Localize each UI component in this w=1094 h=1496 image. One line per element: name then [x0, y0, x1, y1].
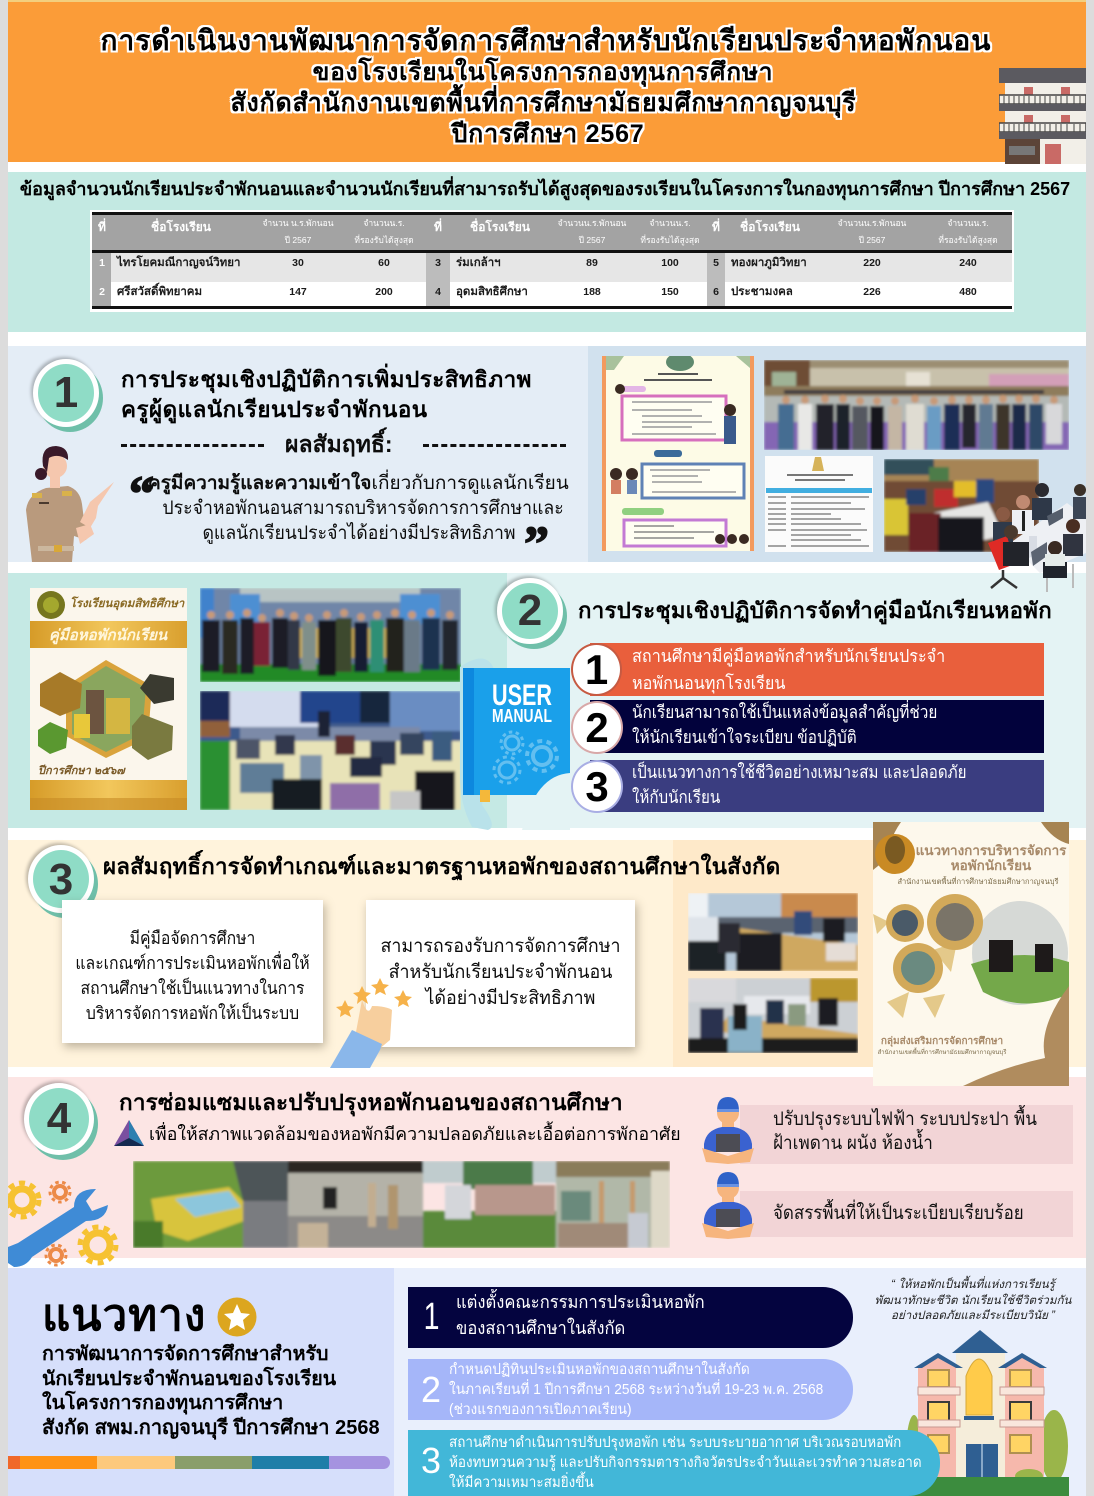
card left: และเกณฑ์การประเมินหอพักเพื่อให้	[75, 953, 310, 973]
title	[100, 24, 992, 148]
illustration: office meeting	[988, 483, 1086, 592]
table: schools: 89	[586, 257, 598, 269]
image: meeting photo 2	[688, 978, 858, 1053]
table: schools: ชื่อโรงเรียน	[740, 220, 800, 234]
page side strips	[0, 0, 8, 1496]
bar 1	[590, 643, 1044, 696]
pill 2: ในภาคเรียนที่ 1 ปีการศึกษา 2568 ระหว่างวันที่ 19-23 พ.ค. 2568	[449, 1382, 823, 1398]
image: guidance cover: กลุ่มส่งเสริมการจัดการศึกษา	[881, 1035, 1003, 1047]
heading section 1	[121, 364, 532, 424]
number 3	[571, 760, 623, 813]
number 3: 3	[585, 763, 609, 810]
card left: มีคู่มือจัดการศึกษา	[130, 928, 255, 948]
bar 2	[590, 700, 1044, 753]
illustration: house	[908, 1330, 1069, 1496]
icon: technician 2	[702, 1172, 754, 1239]
table: schools: 5	[713, 257, 719, 269]
badge 1	[33, 359, 99, 427]
image: manual cover	[30, 588, 187, 810]
image: seminar photo	[200, 691, 461, 810]
subheading section 4: เพื่อให้สภาพแวดล้อมของหอพักมีความปลอดภัยและเอื้อต่อการพักอาศัย	[149, 1124, 681, 1144]
icon: teacher	[26, 446, 114, 562]
icon: user manual book: MANUAL	[492, 706, 552, 726]
table: schools: ปี 2567	[285, 235, 311, 245]
table: schools: 3	[435, 257, 441, 269]
panel: section 3	[8, 840, 1086, 1067]
table: schools: 240	[959, 257, 977, 269]
badge 2: 2	[518, 586, 542, 635]
heading section 3: ผลสัมฤทธิ์การจัดทำเกณฑ์และมาตรฐานหอพักของสถานศึกษาในสังกัด	[103, 854, 780, 879]
table: schools: อุดมสิทธิศึกษา	[456, 286, 528, 298]
badge 2	[497, 578, 563, 644]
icon: user manual book	[460, 658, 570, 830]
title: สังกัดสำนักงานเขตพื้นที่การศึกษามัธยมศึกษากาญจนบุรี	[230, 89, 857, 117]
bar 1: หอพักนอนทุกโรงเรียน	[632, 673, 785, 693]
table: schools: ปี 2567	[579, 235, 605, 245]
guidelines text	[42, 1343, 380, 1440]
pill 3: สถานศึกษาดำเนินการปรับปรุงหอพัก เช่น ระบบระบายอากาศ บริเวณรอบหอพัก	[449, 1435, 901, 1451]
table: schools: ชื่อโรงเรียน	[151, 220, 211, 234]
card right: ได้อย่างมีประสิทธิภาพ	[425, 988, 595, 1009]
guidelines text: สังกัด สพม.กาญจนบุรี ปีการศึกษา 2568	[42, 1416, 380, 1438]
bar 2: นักเรียนสามารถใช้เป็นแหล่งข้อมูลสำคัญที่ช่วย	[632, 702, 937, 722]
panel: header banner	[8, 0, 1086, 162]
image: manual cover: ปีการศึกษา ๒๕๖๗	[38, 764, 126, 777]
icon: wrench and gears	[8, 1180, 118, 1267]
result text: ครูมีความรู้และความเข้าใจเกี่ยวกับการดูแลนักเรียน	[148, 473, 569, 494]
table: schools: ไทรโยคมณีกาญจน์วิทยา	[117, 257, 240, 269]
table: schools: 2	[99, 286, 105, 298]
pill 1: ของสถานศึกษาในสังกัด	[456, 1318, 625, 1338]
heading section 1: การประชุมเชิงปฏิบัติการเพิ่มประสิทธิภาพ	[121, 367, 532, 392]
panel: section 1 text	[8, 346, 588, 562]
panel: section 4	[8, 1077, 1086, 1258]
card right	[366, 900, 635, 1047]
result divider: ผลสัมฤทธิ์:	[285, 431, 393, 457]
guidelines text: ในโครงการกองทุนการศึกษา	[42, 1392, 283, 1414]
bar 1: สถานศึกษามีคู่มือหอพักสำหรับนักเรียนประจำ	[632, 646, 945, 666]
result text	[148, 470, 569, 544]
table: schools: ที่	[712, 220, 720, 234]
result divider	[121, 427, 566, 457]
image: schedule poster	[602, 356, 754, 551]
heading section 1: ครูผู้ดูแลนักเรียนประจำพักนอน	[121, 397, 428, 422]
icon: open quote: “	[129, 465, 154, 521]
table: schools: ที่	[98, 220, 106, 234]
table: schools: 147	[289, 286, 307, 298]
image: group photo 1	[764, 360, 1069, 450]
quote: พัฒนาทักษะชีวิต นักเรียนใช้ชีวิตร่วมกัน	[875, 1294, 1071, 1306]
bar 3: เป็นแนวทางการใช้ชีวิตอย่างเหมาะสม และปลอดภัย	[632, 762, 967, 782]
table: schools: ชื่อโรงเรียน	[470, 220, 530, 234]
number 1: 1	[585, 646, 608, 693]
table: schools: 188	[583, 286, 601, 298]
image: guidance cover: สำนักงานเขตพื้นที่การศึกษามัธยมศึกษากาญจนบุรี	[878, 1046, 1007, 1056]
table: schools: จำนวนน.ร.	[649, 218, 691, 228]
heading section 2: การประชุมเชิงปฏิบัติการจัดทำคู่มือนักเรียนหอพัก	[578, 598, 1052, 623]
pill 2	[408, 1359, 853, 1420]
number 2: 2	[585, 704, 609, 751]
panel: guidelines left	[8, 1268, 394, 1496]
table: schools: 226	[863, 286, 881, 298]
guidelines text: นักเรียนประจำพักนอนของโรงเรียน	[42, 1368, 336, 1390]
result text: ดูแลนักเรียนประจำได้อย่างมีประสิทธิภาพ	[202, 523, 516, 544]
table: schools: จำนวนน.ร.	[363, 218, 405, 228]
table: schools	[90, 210, 1014, 312]
badge 3: 3	[49, 855, 73, 904]
badge 4	[24, 1083, 94, 1155]
table: schools: ศรีสวัสดิ์พิทยาคม	[117, 286, 202, 298]
guidelines text: การพัฒนาการจัดการศึกษาสำหรับ	[42, 1343, 328, 1365]
colour strip	[8, 1456, 390, 1469]
table: schools: ทองผาภูมิวิทยา	[731, 257, 807, 269]
bar 2 repairs	[740, 1191, 1073, 1237]
table: schools: 150	[661, 286, 679, 298]
card right: สำหรับนักเรียนประจำพักนอน	[389, 962, 612, 983]
image: guidance cover: แนวทางการบริหารจัดการ	[916, 843, 1067, 858]
table: schools: จำนวนน.ร.	[947, 218, 989, 228]
title: ของโรงเรียนในโครงการกองทุนการศึกษา	[313, 58, 773, 86]
badge 4: 4	[47, 1094, 71, 1143]
table: schools: จำนวนน.ร.พักนอน	[558, 218, 626, 228]
icon: triangle	[114, 1120, 144, 1146]
table: schools: 220	[863, 257, 881, 269]
pill 2: (ช่วงแรกของการเปิดภาคเรียน)	[449, 1402, 632, 1418]
pill 2: 2	[421, 1369, 441, 1410]
number 1	[571, 643, 622, 696]
card right: สามารถรองรับการจัดการศึกษา	[381, 936, 620, 957]
table: schools: 1	[99, 257, 105, 269]
pill 2: กำหนดปฏิทินประเมินหอพักของสถานศึกษาในสังกัด	[449, 1362, 750, 1378]
image: guidance cover: สำนักงานเขตพื้นที่การศึกษามัธยมศึกษากาญจนบุรี	[897, 876, 1059, 886]
icon: star badge	[218, 1298, 256, 1336]
result text: ประจำหอพักนอนสามารถบริหารจัดการการศึกษาและ	[162, 498, 564, 519]
badge 3	[28, 845, 94, 913]
card left	[62, 900, 323, 1043]
panel: section 2 photos	[8, 573, 507, 828]
table: schools: จำนวน น.ร.พักนอน	[262, 218, 334, 228]
pill 3: ให้มีความเหมาะสมยิ่งขึ้น	[449, 1475, 594, 1491]
table: schools: ประชามงคล	[731, 286, 793, 298]
heading: student data: ข้อมูลจำนวนนักเรียนประจำพักนอนและจำนวนนักเรียนที่สามารถรับได้สูงสุดของรงเรียนในโครงการในกองทุนการศึกษา ปีการศึกษา 2567	[20, 179, 1070, 199]
heading section 4: การซ่อมแซมและปรับปรุงหอพักนอนของสถานศึกษา	[119, 1090, 623, 1115]
pill 1: แต่งตั้งคณะกรรมการประเมินหอพัก	[456, 1292, 705, 1312]
table: schools: ที่รองรับได้สูงสุด	[354, 235, 414, 245]
card left: สถานศึกษาใช้เป็นแนวทางในการ	[80, 978, 305, 998]
card left: บริหารจัดการหอพักให้เป็นระบบ	[86, 1003, 299, 1023]
table: schools: ที่	[434, 220, 442, 234]
quote	[875, 1276, 1072, 1322]
panel: section 1 photos	[588, 346, 1086, 562]
pill 3: 3	[421, 1440, 441, 1481]
table: schools: 4	[435, 286, 441, 298]
title: การดำเนินงานพัฒนาการจัดการศึกษาสำหรับนักเรียนประจำหอพักนอน	[100, 25, 992, 56]
table: schools: ปี 2567	[859, 235, 885, 245]
table: schools: ที่รองรับได้สูงสุด	[640, 235, 700, 245]
icon: dormitory building	[999, 68, 1086, 164]
icon: close quote: ”	[524, 515, 549, 571]
table: schools: 6	[713, 286, 719, 298]
table: schools: 480	[959, 286, 977, 298]
quote: อย่างปลอดภัยและมีระเบียบวินัย ”	[891, 1309, 1055, 1322]
image: workshop photo	[884, 459, 1039, 552]
pill 3: ห้องทบทวนความรู้ และปรับกิจกรรมตารางกิจวัตรประจำวันและเวรทำความสะอาด	[449, 1455, 922, 1471]
bar 2: ให้นักเรียนเข้าใจระเบียบ ข้อปฏิบัติ	[632, 727, 857, 747]
bar 1 repairs: ปรับปรุงระบบไฟฟ้า ระบบประปา พื้น	[773, 1109, 1037, 1130]
title: ปีการศึกษา 2567	[452, 120, 644, 148]
badge 1: 1	[54, 368, 78, 417]
image: guidance cover	[873, 822, 1069, 1086]
image: manual cover: คู่มือหอพักนักเรียน	[49, 627, 168, 645]
pill 3	[408, 1430, 940, 1496]
table: schools: 60	[378, 257, 390, 269]
image: group photo 2	[200, 588, 461, 682]
image: manual cover: โรงเรียนอุดมสิทธิศึกษา	[70, 596, 185, 611]
icon: technician 1	[702, 1097, 754, 1164]
bar 1 repairs	[740, 1105, 1073, 1164]
image: agenda document	[765, 456, 873, 552]
panel: guidelines right	[394, 1268, 1086, 1496]
bar 2 repairs: จัดสรรพื้นที่ให้เป็นระเบียบเรียบร้อย	[773, 1203, 1024, 1224]
image: guidance cover: หอพักนักเรียน	[951, 858, 1032, 873]
quote: “ ให้หอพักเป็นพื้นที่แห่งการเรียนรู้	[891, 1278, 1055, 1291]
pill 1: 1	[424, 1296, 439, 1338]
heading: guidelines: แนวทาง	[42, 1291, 206, 1340]
table: schools: ที่รองรับได้สูงสุด	[938, 235, 998, 245]
bar 1 repairs: ฝ้าเพดาน ผนัง ห้องน้ำ	[773, 1133, 933, 1154]
table: schools: 100	[661, 257, 679, 269]
image: repair photos	[133, 1161, 670, 1248]
table: schools: 200	[375, 286, 393, 298]
image: meeting photo 1	[688, 893, 858, 971]
number 2	[571, 701, 623, 754]
pill 1	[408, 1287, 853, 1348]
panel: section 2 content	[507, 573, 1086, 828]
bar 3	[590, 760, 1044, 812]
table: schools: ร่มเกล้าฯ	[456, 257, 501, 269]
icon: thumbs up with stars	[330, 978, 412, 1068]
table: schools: จำนวนน.ร.พักนอน	[838, 218, 906, 228]
panel: student data	[8, 172, 1086, 332]
table: schools: 30	[292, 257, 304, 269]
bar 3: ให้กับนักเรียน	[632, 787, 720, 807]
